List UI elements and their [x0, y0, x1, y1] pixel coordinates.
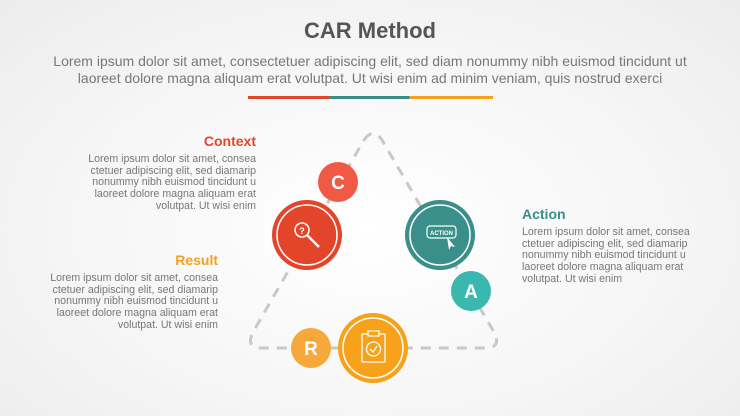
- icon: action circle: ACTION: [430, 231, 453, 237]
- title: CAR Method: [304, 18, 436, 43]
- panel: action text: nonummy nibh euismod tincidunt u: [522, 249, 686, 261]
- panel: result text: [50, 252, 218, 331]
- icon: context circle: [272, 200, 342, 270]
- panel: action text: laoreet dolore magna aliquam erat: [522, 261, 683, 273]
- panel: result text: ctetuer adipiscing elit, sed diamarip: [53, 284, 218, 296]
- panel: context text: volutpat. Ut wisi enim: [156, 200, 256, 212]
- icon: A badge: [451, 271, 491, 311]
- panel: context text: [88, 133, 256, 212]
- panel: result text: volutpat. Ut wisi enim: [118, 319, 218, 331]
- icon: R badge: R: [304, 339, 318, 360]
- icon: R badge: [291, 328, 331, 368]
- icon: result circle: [338, 313, 408, 383]
- subtitle: laoreet dolore magna aliquam erat volutpat. Ut wisi enim ad minim veniam, quis nostrud exerci: [78, 70, 662, 86]
- panel: result text: nonummy nibh euismod tincidunt u: [54, 295, 218, 307]
- panel: result text: Result: [175, 252, 218, 268]
- panel: context text: Context: [204, 133, 256, 149]
- subtitle: [53, 53, 687, 86]
- icon: A badge: A: [464, 282, 478, 303]
- panel: context text: ctetuer adipiscing elit, sed diamarip: [91, 165, 256, 177]
- panel: context text: laoreet dolore magna aliquam erat: [95, 188, 256, 200]
- panel: context text: Lorem ipsum dolor sit amet, consea: [88, 153, 256, 165]
- panel: action text: volutpat. Ut wisi enim: [522, 273, 622, 285]
- panel: action text: Action: [522, 206, 566, 222]
- panel: result text: Lorem ipsum dolor sit amet, consea: [50, 272, 218, 284]
- subtitle: Lorem ipsum dolor sit amet, consectetuer adipiscing elit, sed diam nonummy nibh euismod tincidunt ut: [53, 53, 687, 69]
- icon: C badge: [318, 162, 358, 202]
- panel: context text: nonummy nibh euismod tincidunt u: [92, 176, 256, 188]
- title underline: [248, 96, 493, 99]
- panel: action text: [522, 206, 690, 285]
- panel: action text: Lorem ipsum dolor sit amet, consea: [522, 226, 690, 238]
- icon: action circle: [405, 200, 475, 270]
- panel: action text: ctetuer adipiscing elit, sed diamarip: [522, 238, 687, 250]
- panel: result text: laoreet dolore magna aliquam erat: [57, 307, 218, 319]
- icon: context circle: ?: [299, 226, 305, 236]
- icon: C badge: C: [331, 173, 345, 194]
- dashed triangle: [250, 134, 497, 348]
